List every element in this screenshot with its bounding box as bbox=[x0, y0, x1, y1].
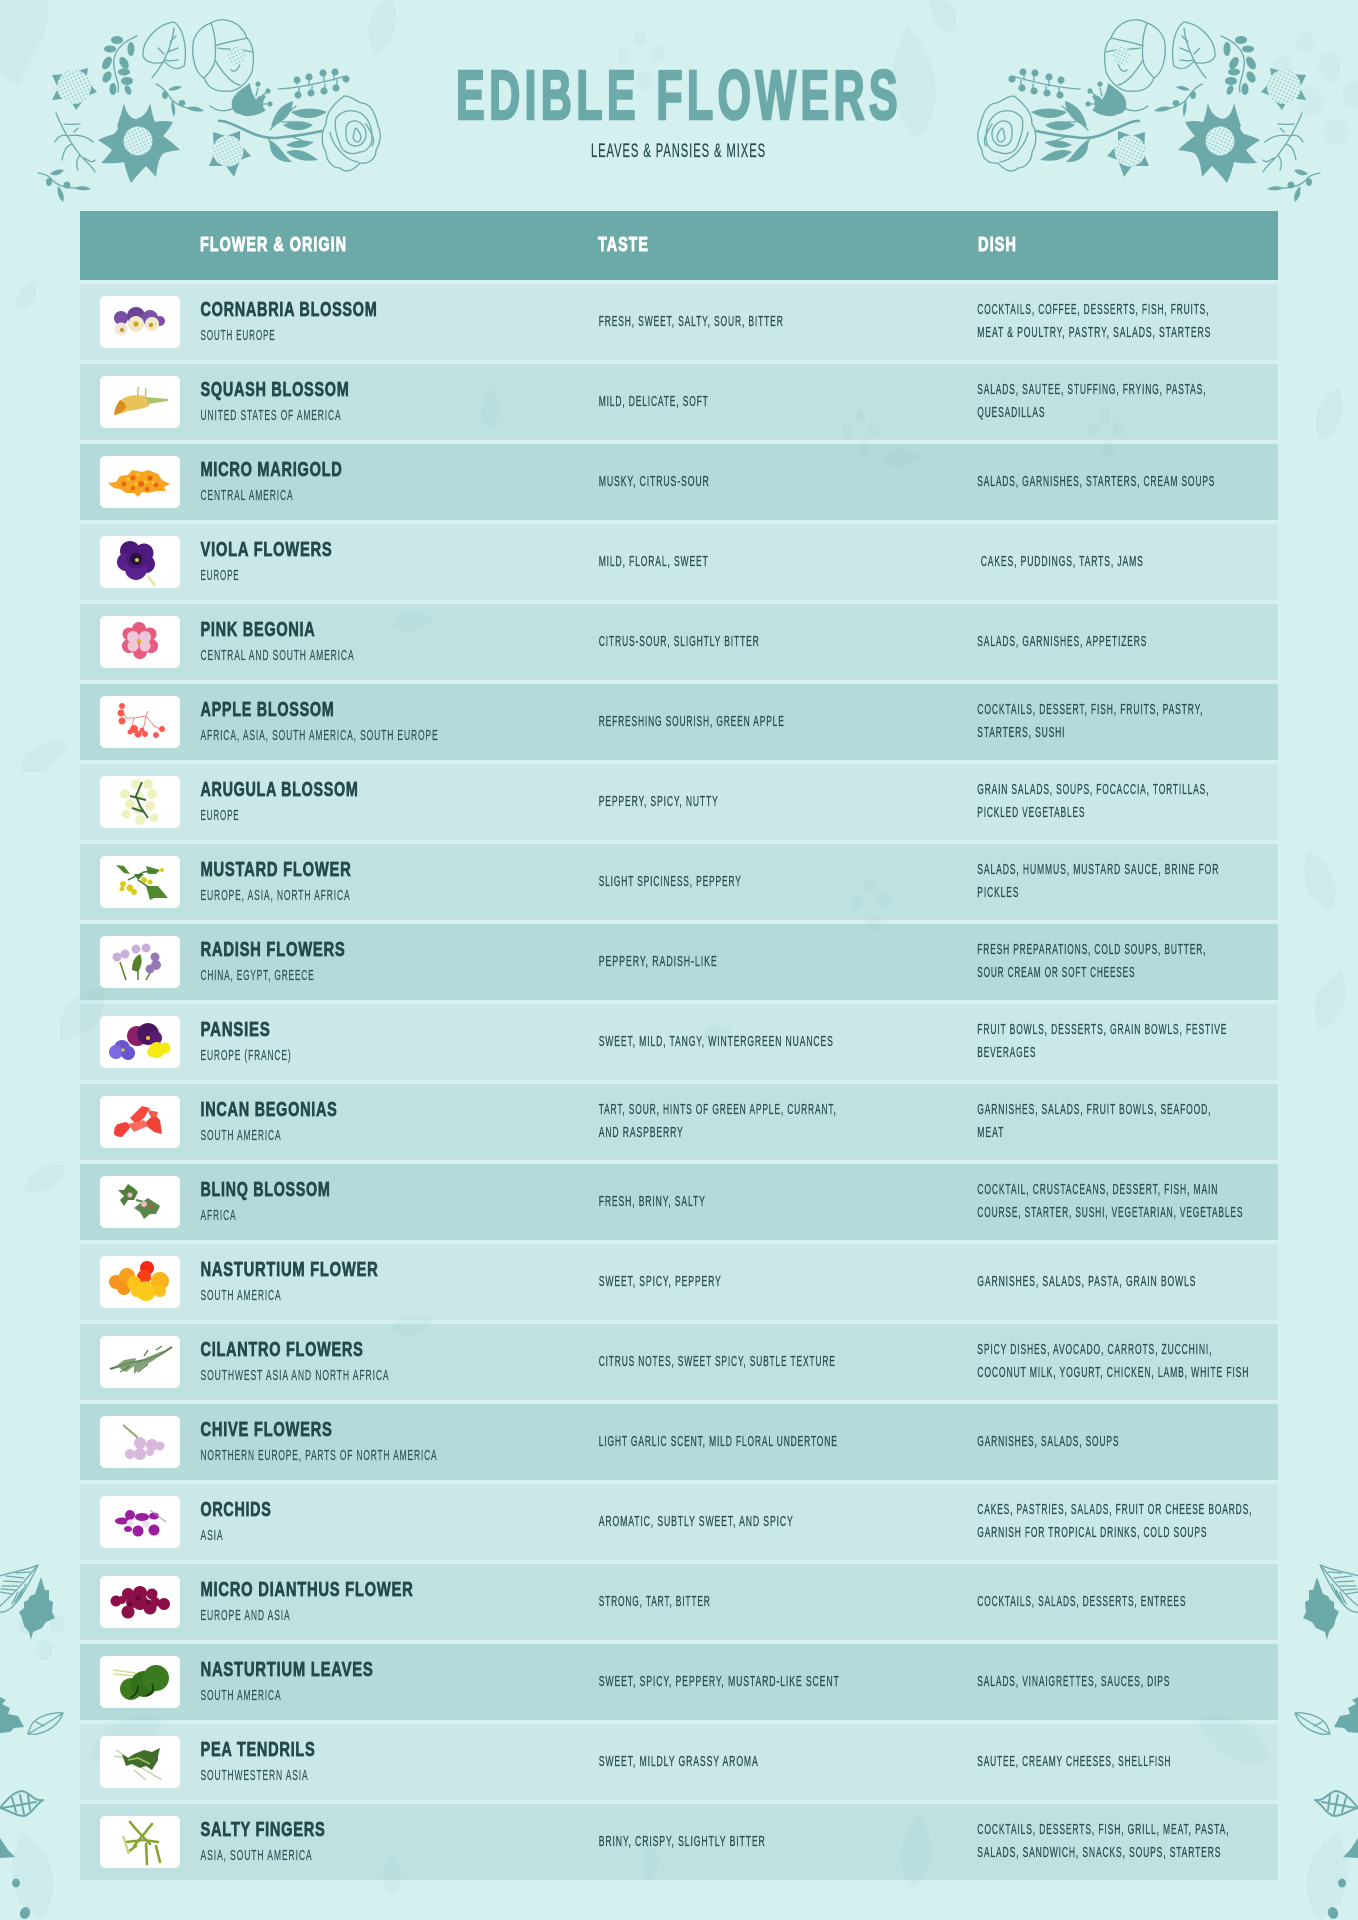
row: pansies bbox=[80, 1004, 1278, 1080]
name: CHIVE FLOWERS bbox=[200, 1419, 332, 1441]
row: chive flowers bbox=[80, 1404, 1278, 1480]
photo: mustard flower bbox=[100, 856, 180, 908]
origin: CENTRAL AMERICA bbox=[200, 488, 294, 504]
row: squash blossom bbox=[80, 364, 1278, 440]
origin: UNITED STATES OF AMERICA bbox=[200, 408, 342, 424]
row: radish flowers bbox=[80, 924, 1278, 1000]
dish: STARTERS, SUSHI bbox=[977, 725, 1065, 741]
name: CORNABRIA BLOSSOM bbox=[200, 299, 378, 321]
dish bbox=[977, 1502, 1252, 1541]
photo: chive flowers bbox=[100, 1416, 180, 1468]
origin: AFRICA bbox=[200, 1208, 236, 1224]
photo: nasturtium flower bbox=[100, 1256, 180, 1308]
row: nasturtium leaves bbox=[80, 1644, 1278, 1720]
row: pea tendrils bbox=[80, 1724, 1278, 1800]
name: RADISH FLOWERS bbox=[200, 939, 346, 961]
taste: REFRESHING SOURISH, GREEN APPLE bbox=[599, 714, 785, 730]
dish: SAUTEE, CREAMY CHEESES, SHELLFISH bbox=[977, 1754, 1171, 1770]
dish: COCKTAILS, SALADS, DESSERTS, ENTREES bbox=[977, 1594, 1186, 1610]
taste: SWEET, MILD, TANGY, WINTERGREEN NUANCES bbox=[599, 1034, 834, 1050]
origin: ASIA, SOUTH AMERICA bbox=[200, 1848, 312, 1864]
photo: apple blossom bbox=[100, 696, 180, 748]
origin: NORTHERN EUROPE, PARTS OF NORTH AMERICA bbox=[200, 1448, 438, 1464]
origin: EUROPE, ASIA, NORTH AFRICA bbox=[200, 888, 350, 904]
name: BLINQ BLOSSOM bbox=[200, 1179, 330, 1201]
taste: MUSKY, CITRUS-SOUR bbox=[599, 474, 710, 490]
dish bbox=[977, 702, 1203, 741]
name: MICRO DIANTHUS FLOWER bbox=[200, 1579, 414, 1601]
side leaves left bbox=[0, 1565, 63, 1920]
taste: SWEET, MILDLY GRASSY AROMA bbox=[599, 1754, 759, 1770]
dish bbox=[977, 302, 1211, 341]
name: CILANTRO FLOWERS bbox=[200, 1339, 364, 1361]
name: SQUASH BLOSSOM bbox=[200, 379, 350, 401]
taste: PEPPERY, SPICY, NUTTY bbox=[599, 794, 719, 810]
row: pink begonia bbox=[80, 604, 1278, 680]
floral bouquet left bbox=[38, 20, 380, 202]
row: micro marigold bbox=[80, 444, 1278, 520]
dish: SALADS, VINAIGRETTES, SAUCES, DIPS bbox=[977, 1674, 1170, 1690]
dish: GARNISHES, SALADS, PASTA, GRAIN BOWLS bbox=[977, 1274, 1196, 1290]
column heading: taste: TASTE bbox=[598, 234, 649, 256]
photo: micro dianthus flower bbox=[100, 1576, 180, 1628]
row: incan begonias bbox=[80, 1084, 1278, 1160]
name: NASTURTIUM LEAVES bbox=[200, 1659, 374, 1681]
taste: AROMATIC, SUBTLY SWEET, AND SPICY bbox=[599, 1514, 794, 1530]
column heading: flower and origin: FLOWER & ORIGIN bbox=[200, 234, 347, 256]
row: apple blossom bbox=[80, 684, 1278, 760]
dish: SOUR CREAM OR SOFT CHEESES bbox=[977, 965, 1135, 981]
name: MUSTARD FLOWER bbox=[200, 859, 352, 881]
dish bbox=[977, 862, 1219, 901]
photo: incan begonias bbox=[100, 1096, 180, 1148]
photo: cilantro flowers bbox=[100, 1336, 180, 1388]
name: MICRO MARIGOLD bbox=[200, 459, 342, 481]
title: EDIBLE FLOWERS bbox=[456, 56, 902, 134]
photo: radish flowers bbox=[100, 936, 180, 988]
origin: SOUTHWESTERN ASIA bbox=[200, 1768, 308, 1784]
origin: SOUTH AMERICA bbox=[200, 1288, 282, 1304]
photo: salty fingers bbox=[100, 1816, 180, 1868]
origin: SOUTHWEST ASIA AND NORTH AFRICA bbox=[200, 1368, 390, 1384]
name: ORCHIDS bbox=[200, 1499, 272, 1521]
row: cilantro flowers bbox=[80, 1324, 1278, 1400]
photo: pink begonia bbox=[100, 616, 180, 668]
origin: EUROPE bbox=[200, 808, 240, 824]
dish bbox=[977, 1182, 1243, 1221]
row: orchids bbox=[80, 1484, 1278, 1560]
row: micro dianthus flower bbox=[80, 1564, 1278, 1640]
name: PANSIES bbox=[200, 1019, 270, 1041]
taste: SLIGHT SPICINESS, PEPPERY bbox=[599, 874, 742, 890]
origin: EUROPE (FRANCE) bbox=[200, 1048, 292, 1064]
name: VIOLA FLOWERS bbox=[200, 539, 332, 561]
taste: CITRUS NOTES, SWEET SPICY, SUBTLE TEXTURE bbox=[599, 1354, 836, 1370]
row: mustard flower bbox=[80, 844, 1278, 920]
taste: STRONG, TART, BITTER bbox=[599, 1594, 711, 1610]
floral bouquet right bbox=[978, 20, 1320, 202]
photo: arugula blossom bbox=[100, 776, 180, 828]
row: nasturtium flower bbox=[80, 1244, 1278, 1320]
taste: MILD, FLORAL, SWEET bbox=[599, 554, 709, 570]
taste: SWEET, SPICY, PEPPERY, MUSTARD-LIKE SCENT bbox=[599, 1674, 840, 1690]
taste: FRESH, BRINY, SALTY bbox=[599, 1194, 706, 1210]
dish: MEAT & POULTRY, PASTRY, SALADS, STARTERS bbox=[977, 325, 1211, 341]
origin: CENTRAL AND SOUTH AMERICA bbox=[200, 648, 354, 664]
taste bbox=[599, 1102, 837, 1141]
taste: SWEET, SPICY, PEPPERY bbox=[599, 1274, 722, 1290]
origin: SOUTH AMERICA bbox=[200, 1128, 282, 1144]
taste: TART, SOUR, HINTS OF GREEN APPLE, CURRANT, bbox=[599, 1102, 837, 1118]
side leaves right bbox=[1295, 1565, 1358, 1920]
photo: viola flowers bbox=[100, 536, 180, 588]
dish: COCKTAILS, DESSERT, FISH, FRUITS, PASTRY, bbox=[977, 702, 1203, 718]
taste: FRESH, SWEET, SALTY, SOUR, BITTER bbox=[599, 314, 784, 330]
dish: SALADS, GARNISHES, APPETIZERS bbox=[977, 634, 1147, 650]
dish bbox=[977, 1342, 1249, 1381]
row: arugula blossom bbox=[80, 764, 1278, 840]
taste: CITRUS-SOUR, SLIGHTLY BITTER bbox=[599, 634, 760, 650]
photo: nasturtium leaves bbox=[100, 1656, 180, 1708]
photo: orchids bbox=[100, 1496, 180, 1548]
row: blinq blossom bbox=[80, 1164, 1278, 1240]
origin: SOUTH EUROPE bbox=[200, 328, 276, 344]
taste: MILD, DELICATE, SOFT bbox=[599, 394, 709, 410]
photo: pansies bbox=[100, 1016, 180, 1068]
dish: PICKLES bbox=[977, 885, 1019, 901]
column heading: dish: DISH bbox=[978, 234, 1017, 256]
origin: EUROPE AND ASIA bbox=[200, 1608, 290, 1624]
name: ARUGULA BLOSSOM bbox=[200, 779, 358, 801]
dish: QUESADILLAS bbox=[977, 405, 1045, 421]
name: PINK BEGONIA bbox=[200, 619, 316, 641]
photo: cornabria blossom bbox=[100, 296, 180, 348]
dish bbox=[977, 942, 1206, 981]
dish bbox=[977, 1022, 1227, 1061]
photo: squash blossom bbox=[100, 376, 180, 428]
photo: pea tendrils bbox=[100, 1736, 180, 1788]
origin: ASIA bbox=[200, 1528, 224, 1544]
taste: AND RASPBERRY bbox=[599, 1125, 684, 1141]
origin: AFRICA, ASIA, SOUTH AMERICA, SOUTH EUROPE bbox=[200, 728, 438, 744]
dish bbox=[977, 1822, 1229, 1861]
taste: PEPPERY, RADISH-LIKE bbox=[599, 954, 718, 970]
dish bbox=[977, 382, 1206, 421]
table header bbox=[80, 211, 1278, 280]
name: SALTY FINGERS bbox=[200, 1819, 326, 1841]
name: NASTURTIUM FLOWER bbox=[200, 1259, 378, 1281]
dish: GARNISHES, SALADS, SOUPS bbox=[977, 1434, 1119, 1450]
row: salty fingers bbox=[80, 1804, 1278, 1880]
dish bbox=[977, 1102, 1211, 1141]
taste: LIGHT GARLIC SCENT, MILD FLORAL UNDERTONE bbox=[599, 1434, 838, 1450]
name: INCAN BEGONIAS bbox=[200, 1099, 338, 1121]
origin: CHINA, EGYPT, GREECE bbox=[200, 968, 314, 984]
dish bbox=[977, 782, 1209, 821]
dish: BEVERAGES bbox=[977, 1045, 1036, 1061]
origin: EUROPE bbox=[200, 568, 240, 584]
origin: SOUTH AMERICA bbox=[200, 1688, 282, 1704]
name: PEA TENDRILS bbox=[200, 1739, 316, 1761]
subtitle: LEAVES & PANSIES & MIXES bbox=[591, 141, 766, 162]
name: APPLE BLOSSOM bbox=[200, 699, 334, 721]
photo: blinq blossom bbox=[100, 1176, 180, 1228]
row: cornabria blossom bbox=[80, 284, 1278, 360]
dish: MEAT bbox=[977, 1125, 1004, 1141]
taste: BRINY, CRISPY, SLIGHTLY BITTER bbox=[599, 1834, 766, 1850]
dish: CAKES, PUDDINGS, TARTS, JAMS bbox=[981, 554, 1144, 570]
dish: PICKLED VEGETABLES bbox=[977, 805, 1085, 821]
photo: micro marigold bbox=[100, 456, 180, 508]
row: viola flowers bbox=[80, 524, 1278, 600]
